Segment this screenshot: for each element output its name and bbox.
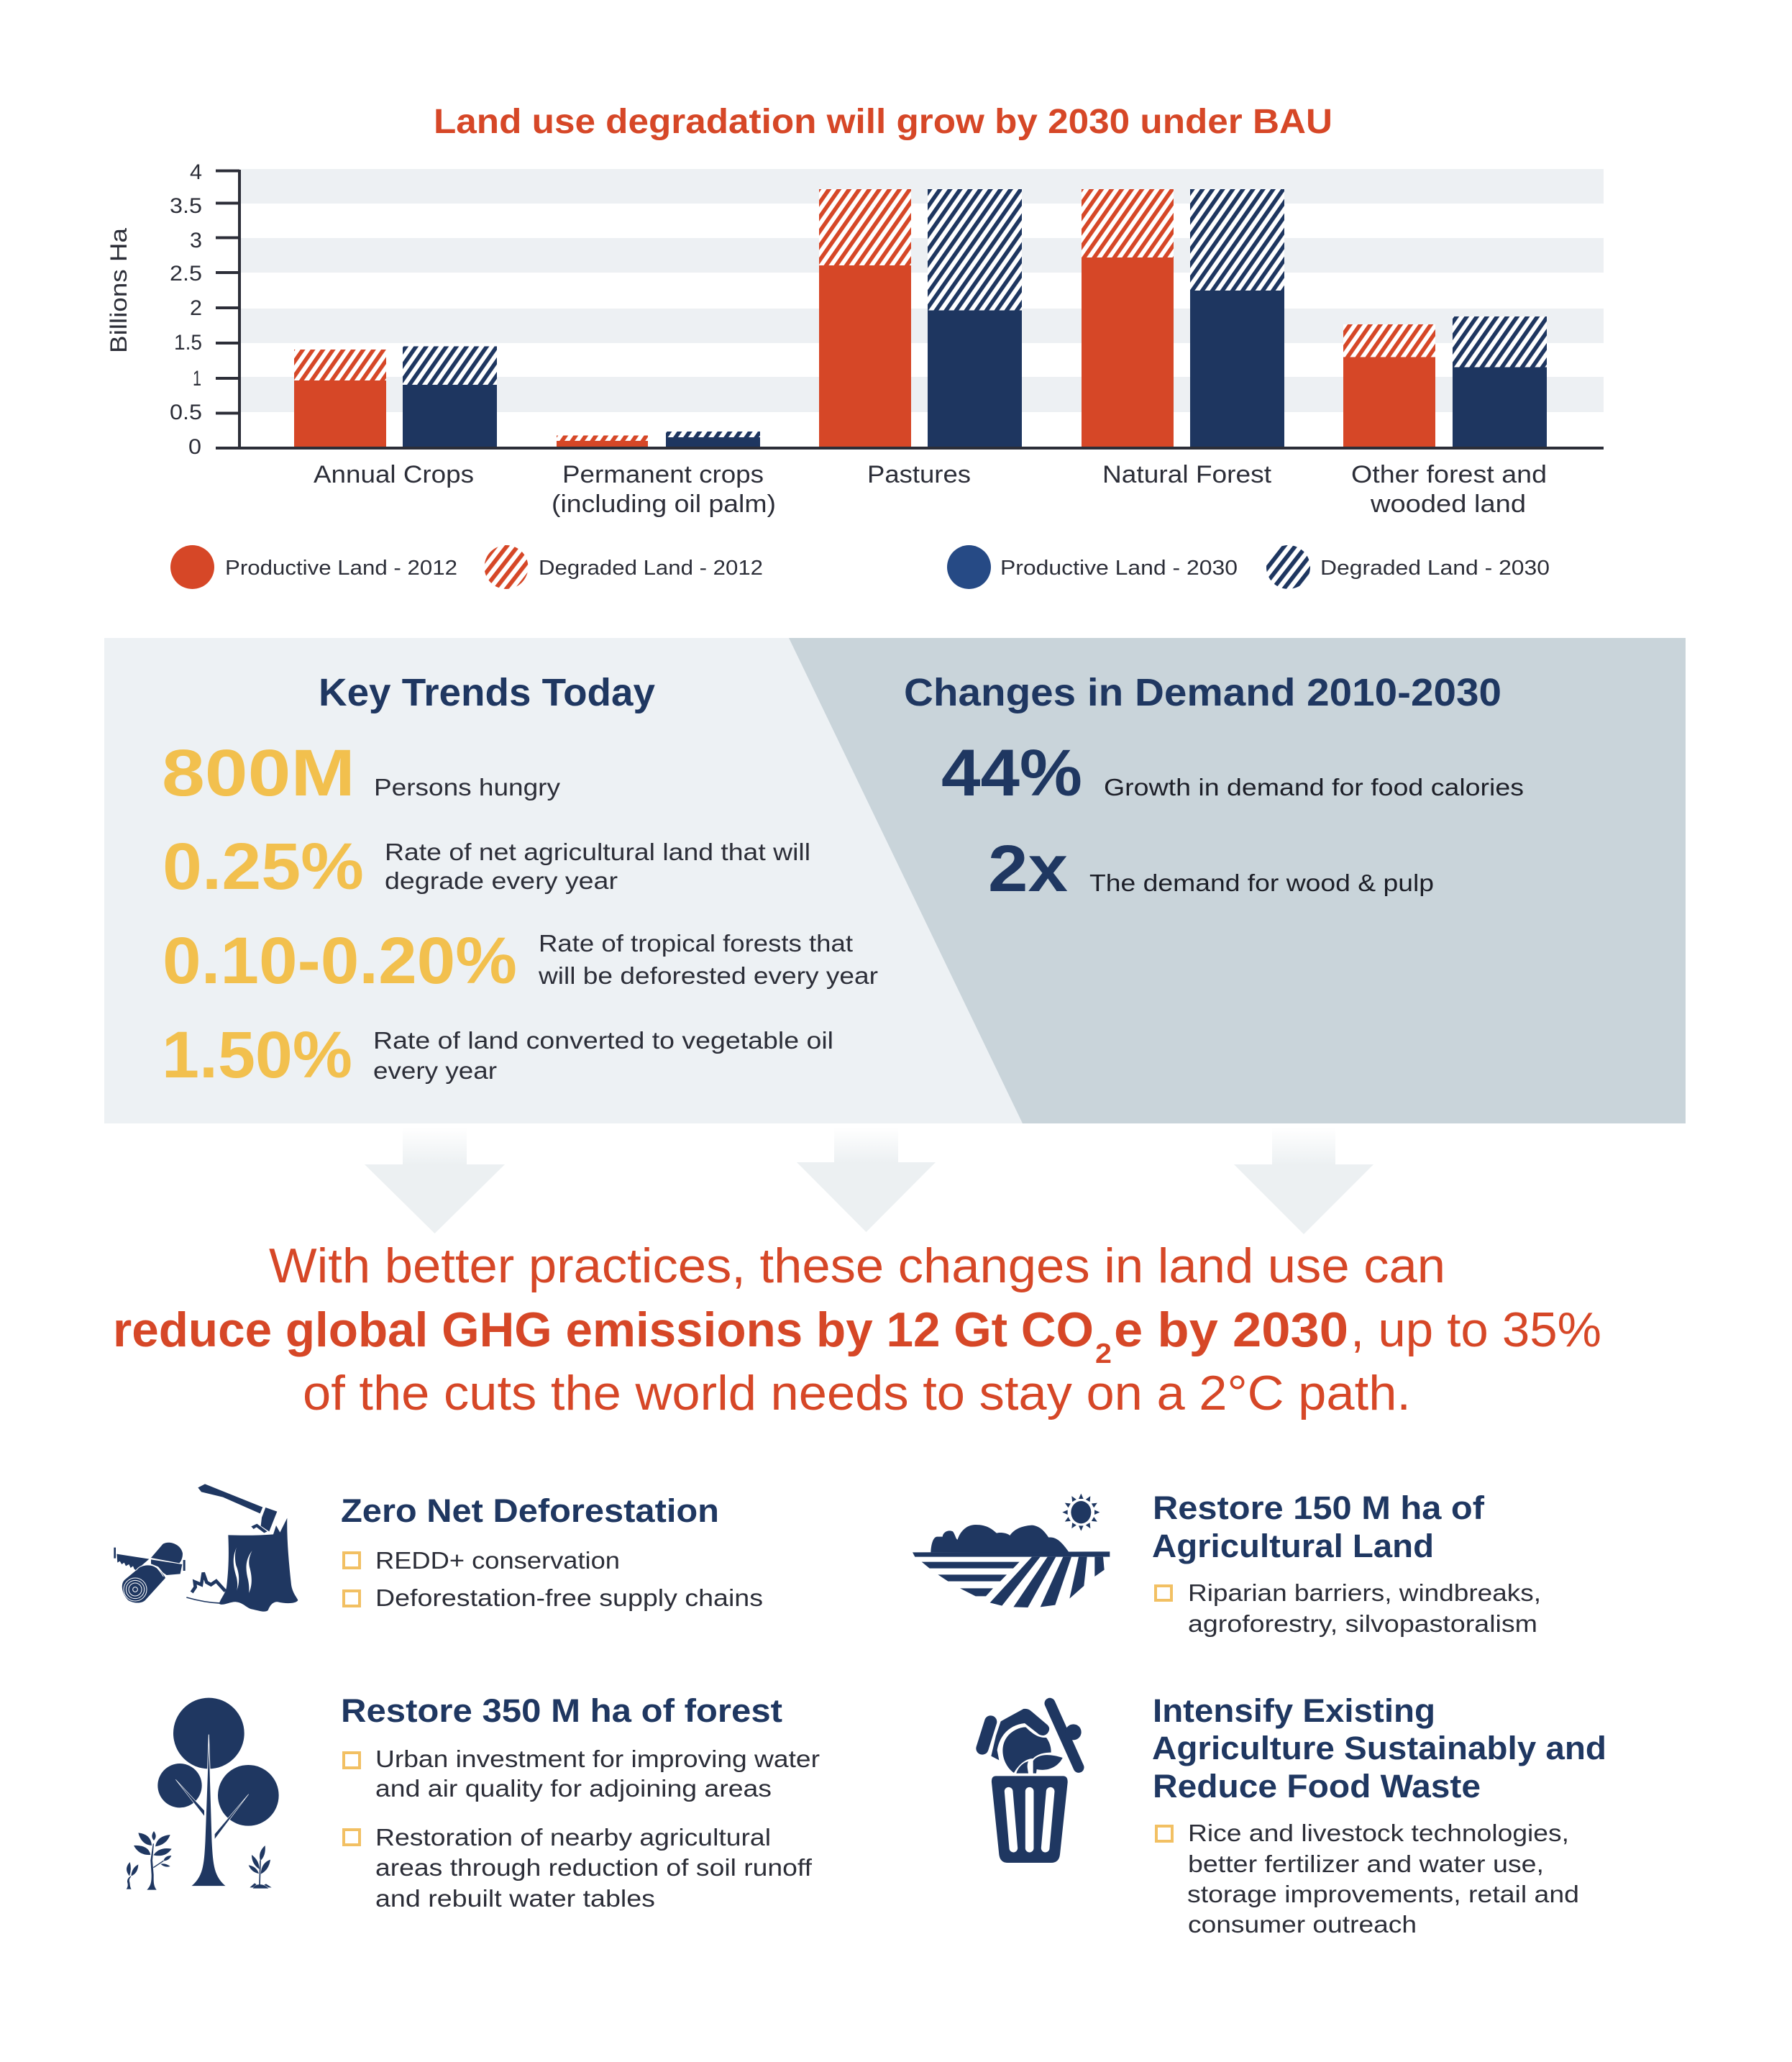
stat: 0.10-0.20%: 0.10-0.20% [163, 924, 517, 998]
text block: restore 150 M ha of agricultural land: agroforestry, silvopastoralism [1188, 1610, 1537, 1637]
stat: 2x: 2x [988, 832, 1068, 905]
bars: pastures [819, 189, 1022, 447]
text block: restore 350 M ha of forest: Urban investment for improving water [375, 1746, 820, 1772]
icon: trees [127, 1698, 279, 1890]
callout: headline statement [113, 1238, 1601, 1420]
y axis: 3 [190, 229, 202, 252]
callout: headline statement: , up to 35% [1350, 1303, 1601, 1357]
heading: key trends today: Key Trends Today [319, 671, 655, 714]
callout: headline statement: With better practices, these changes in land use can [269, 1238, 1445, 1293]
legend: Productive Land - 2012 [225, 557, 457, 580]
y axis: 2.5 [170, 262, 202, 286]
bar chart [106, 160, 1604, 518]
stat: 0.10-0.20%: will be deforested every year [538, 962, 878, 989]
y axis: 2 [190, 296, 202, 320]
stat: 0.25%: degrade every year [385, 867, 618, 894]
stat: 0.10-0.20% [163, 924, 878, 998]
text block: zero net deforestation: Deforestation-free supply chains [375, 1584, 763, 1611]
y axis: 0.5 [170, 401, 202, 424]
callout: headline statement: of the cuts the world needs to stay on a 2°C path. [303, 1366, 1411, 1420]
bars: permanent crops [557, 432, 760, 447]
text block: restore 350 M ha of forest: and rebuilt water tables [375, 1885, 655, 1912]
icon: farmland and sun [913, 1494, 1110, 1607]
text block: restore 350 M ha of forest: and air quality for adjoining areas [375, 1775, 772, 1802]
stat: 0.25%: Rate of net agricultural land that will [385, 839, 810, 865]
text block: intensify existing agriculture: Agriculture Sustainably and [1152, 1730, 1606, 1766]
text block: restore 150 M ha of agricultural land: Riparian barriers, windbreaks, [1188, 1579, 1541, 1606]
text block: intensify existing agriculture: Intensify Existing [1153, 1692, 1435, 1729]
category labels: Permanent crops [562, 461, 764, 488]
category labels: Other forest and [1351, 461, 1547, 488]
arrow: centre [797, 1128, 936, 1232]
bars: other forest [1343, 316, 1547, 447]
heading: changes in demand: Changes in Demand 2010-2030 [904, 671, 1501, 714]
callout: headline statement: e by 2030 [1114, 1303, 1348, 1357]
text block: restore 150 M ha of agricultural land: Restore 150 M ha of [1153, 1490, 1485, 1526]
text block: restore 350 M ha of forest: Restore 350 M ha of forest [341, 1692, 782, 1729]
stat: 2x: The demand for wood & pulp [1089, 870, 1434, 896]
category labels: Annual Crops [314, 461, 474, 488]
legend: Productive Land - 2030 [1000, 557, 1238, 580]
text block: restore 350 M ha of forest: areas through reduction of soil runoff [375, 1854, 813, 1881]
text block: restore 150 M ha of agricultural land: Agricultural Land [1152, 1528, 1434, 1564]
y axis title: Billions Ha [106, 228, 132, 353]
stat: 1.50%: 1.50% [162, 1018, 352, 1092]
title: Land use degradation will grow by 2030 under BAU [434, 103, 1332, 141]
text block: intensify existing agriculture: better fertilizer and water use, [1188, 1851, 1544, 1877]
icon: axe, stump and log [114, 1484, 298, 1612]
stat: 1.50%: every year [373, 1057, 497, 1084]
legend [170, 545, 1550, 589]
text block: zero net deforestation [341, 1492, 763, 1611]
category labels [314, 461, 1547, 518]
stat: 44%: 44% [941, 736, 1082, 810]
text block: intensify existing agriculture: storage improvements, retail and [1187, 1881, 1579, 1907]
stat: 44%: Growth in demand for food calories [1104, 774, 1524, 800]
text block: intensify existing agriculture [1152, 1692, 1606, 1938]
stat: 800M: Persons hungry [374, 774, 561, 800]
callout: headline statement: reduce global GHG emissions by 12 Gt CO [113, 1303, 1094, 1357]
category labels: wooded land [1370, 491, 1526, 518]
panel: key trends and changes in demand [104, 638, 1686, 1123]
text block: intensify existing agriculture: consumer outreach [1188, 1911, 1417, 1938]
y axis: 4 [190, 160, 202, 184]
stat: 0.10-0.20%: Rate of tropical forests that [539, 930, 853, 957]
stat: 0.25% [163, 830, 810, 903]
text block: zero net deforestation: Zero Net Deforestation [341, 1492, 719, 1529]
bars: annual crops [294, 347, 497, 447]
stat: 1.50% [162, 1018, 833, 1092]
text block: restore 350 M ha of forest [341, 1692, 820, 1912]
category labels: Pastures [867, 461, 971, 488]
category labels: (including oil palm) [552, 491, 776, 518]
category labels: Natural Forest [1102, 461, 1272, 488]
stat: 1.50%: Rate of land converted to vegetable oil [373, 1027, 833, 1054]
text block: zero net deforestation: REDD+ conservation [375, 1547, 620, 1574]
y axis: 0 [188, 435, 201, 459]
text block: restore 150 M ha of agricultural land [1152, 1490, 1541, 1637]
arrow: right [1234, 1128, 1373, 1234]
text block: restore 350 M ha of forest: Restoration of nearby agricultural [375, 1824, 771, 1851]
y axis: 1.5 [174, 331, 202, 355]
stat: 800M [162, 736, 561, 810]
text block: intensify existing agriculture: Reduce Food Waste [1153, 1768, 1481, 1805]
legend: Degraded Land - 2030 [1320, 557, 1550, 580]
stat: 0.25%: 0.25% [163, 830, 364, 903]
icon: hand, apple and trash bin [982, 1703, 1082, 1863]
stat: 2x [988, 832, 1434, 905]
text block: intensify existing agriculture: Rice and livestock technologies, [1188, 1820, 1569, 1846]
arrow: left [365, 1128, 505, 1233]
legend: Degraded Land - 2012 [539, 557, 763, 580]
bars: natural forest [1082, 189, 1284, 447]
stat: 44% [941, 736, 1524, 810]
stat: 800M: 800M [162, 736, 355, 810]
y axis [170, 160, 241, 459]
y axis: 3.5 [170, 194, 202, 218]
callout: headline statement: 2 [1095, 1338, 1112, 1369]
y axis: 1 [193, 367, 201, 391]
